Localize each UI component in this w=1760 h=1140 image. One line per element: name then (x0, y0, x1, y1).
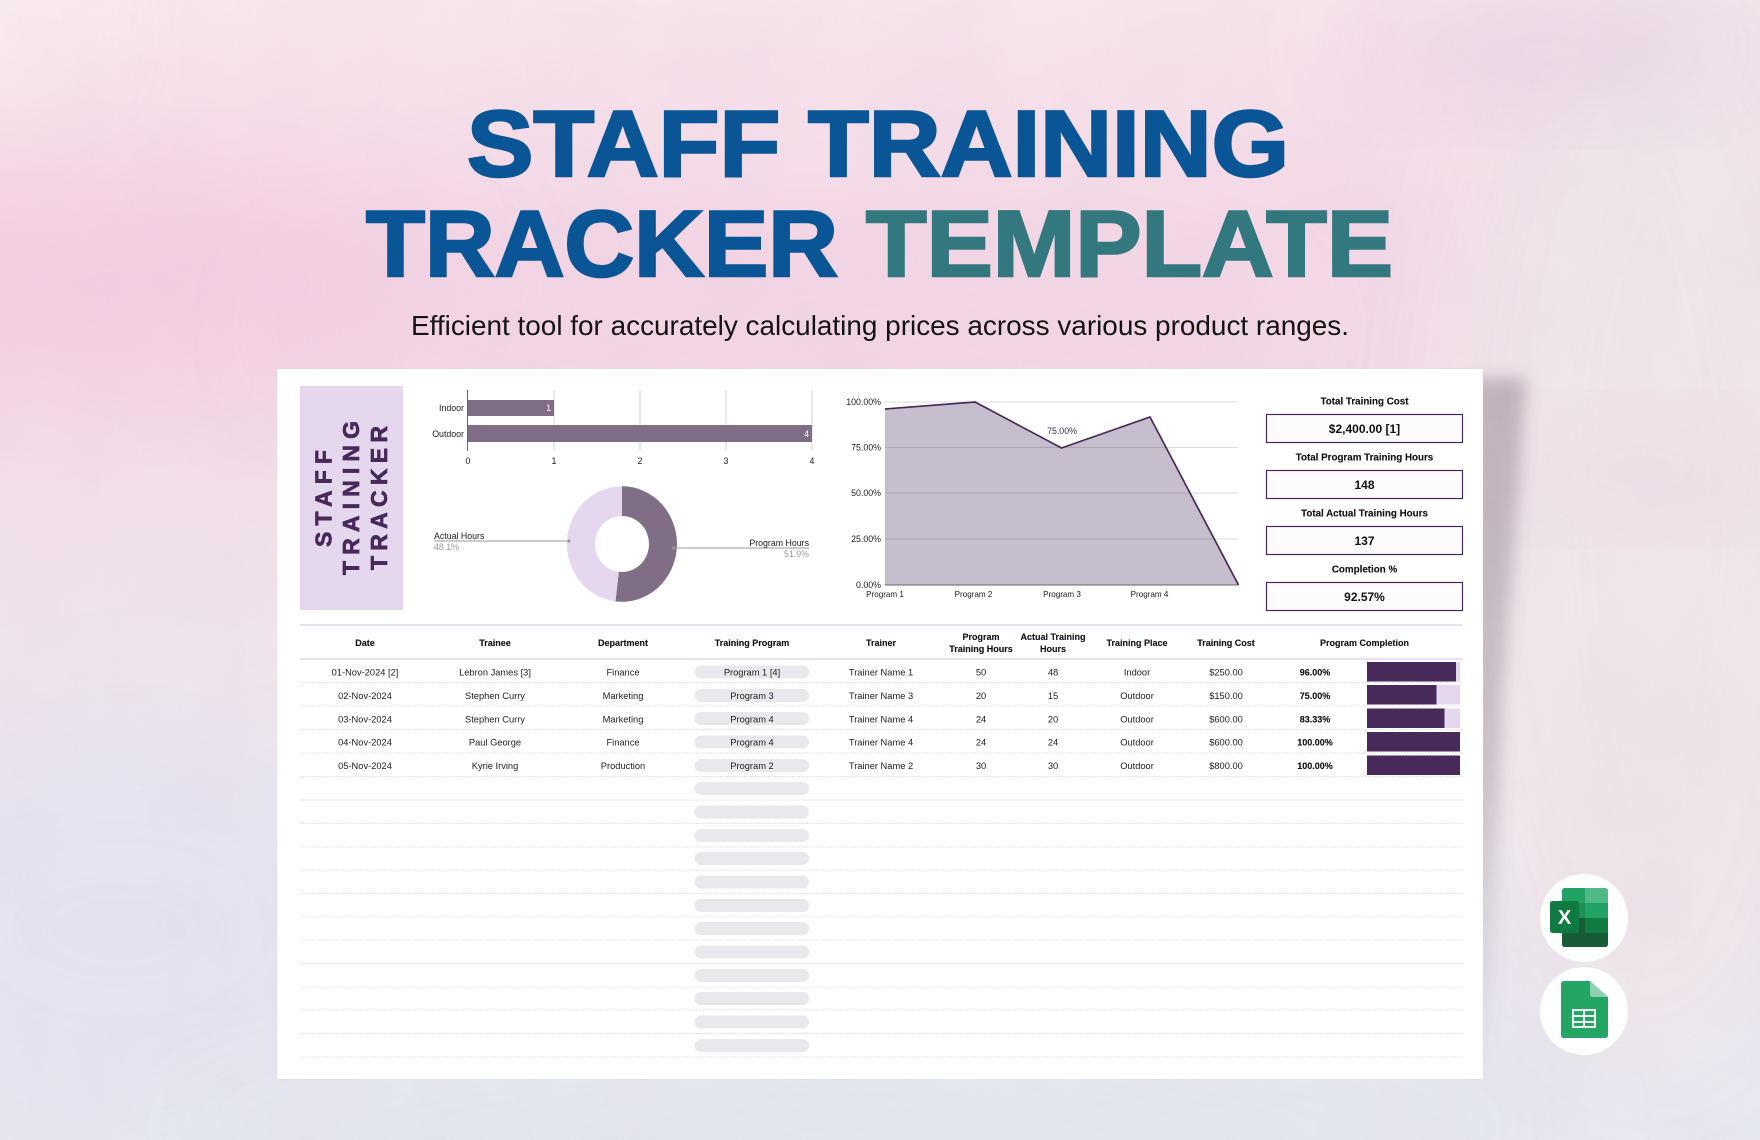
KPI: total program training hours (1266, 452, 1462, 498)
icon: Google Sheets (1540, 967, 1628, 1055)
vertical title block: STAFF (310, 450, 336, 547)
table row 4: Finance (606, 738, 640, 748)
table row 5: Program 2 (730, 761, 774, 771)
area chart: completion by program: 50.00% (851, 488, 881, 498)
title: TEMPLATE (866, 191, 1393, 296)
vertical title block: TRAINING (338, 421, 364, 575)
table row 2: 75.00% (1300, 691, 1330, 701)
table header: Hours (1040, 644, 1066, 654)
bar chart: training place: 1 (552, 456, 557, 466)
table row 1: Lebron James [3] (459, 668, 531, 678)
table row 4: 04-Nov-2024 (338, 738, 392, 748)
table row 4: Program 4 (730, 738, 774, 748)
table header: Trainer (866, 638, 897, 648)
table row 5: Production (601, 761, 645, 771)
KPI: total training cost: Total Training Cost (1320, 396, 1409, 408)
table row 2: 02-Nov-2024 (338, 691, 392, 701)
donut chart: hours (434, 486, 810, 602)
KPI: total training cost: $2,400.00 [1] (1329, 422, 1400, 436)
table row 2: $150.00 (1209, 691, 1243, 701)
donut chart: hours: Program Hours (749, 538, 810, 548)
area chart: completion by program: Program 3 (1043, 590, 1081, 599)
KPI: total program training hours: 148 (1354, 478, 1375, 492)
icon: Microsoft Excel: X (1558, 907, 1572, 929)
table row 1: 01-Nov-2024 [2] (332, 668, 398, 678)
table row 3: Trainer Name 4 (849, 714, 913, 724)
table row 1 (332, 662, 1460, 682)
table row 5: 100.00% (1297, 761, 1333, 771)
table row 4: 24 (1048, 738, 1058, 748)
title: TRACKER (366, 191, 838, 296)
KPI: completion percent: 92.57% (1344, 590, 1385, 604)
table row 1: Indoor (1124, 668, 1150, 678)
bar chart: training place: Outdoor (432, 429, 464, 439)
bar chart: training place: 0 (466, 456, 471, 466)
table header: Program Completion (1320, 638, 1409, 648)
KPI: completion percent (1266, 564, 1462, 610)
table row 2 (338, 685, 1460, 704)
table row 5: Outdoor (1120, 761, 1154, 771)
table row 3: $600.00 (1209, 714, 1243, 724)
table row 3: 20 (1048, 714, 1058, 724)
table row 4: Outdoor (1120, 738, 1154, 748)
table row 2: Stephen Curry (465, 691, 525, 701)
table row 5: 30 (1048, 761, 1058, 771)
table row 4: Paul George (469, 738, 521, 748)
table header: Training Place (1106, 638, 1168, 648)
table row 1: $250.00 (1209, 668, 1243, 678)
table row 5: 30 (976, 761, 986, 771)
table row 5: $800.00 (1209, 761, 1243, 771)
bar chart: training place: 4 (804, 429, 809, 439)
bar chart: training place: 2 (638, 456, 643, 466)
KPI: total program training hours: Total Program Training Hours (1296, 452, 1434, 464)
area chart: completion by program: 75.00% (851, 442, 881, 452)
table header: Training Program (715, 638, 789, 648)
subtitle: Efficient tool for accurately calculating prices across various product ranges. (411, 310, 1349, 341)
table row 5 (338, 756, 1460, 775)
card shadow (1470, 378, 1526, 1050)
KPI: total training cost (1266, 396, 1462, 442)
donut chart: hours: 51.9% (784, 549, 809, 559)
area chart: completion by program: 0.00% (856, 580, 881, 590)
bar chart: training place: Indoor (439, 403, 464, 413)
area chart: completion by program (846, 397, 1238, 599)
program pills (694, 666, 809, 1052)
table row 4 (338, 732, 1460, 752)
bar chart: training place (432, 390, 815, 466)
table row 3: Marketing (603, 714, 643, 724)
area chart: completion by program: 75.00% (1047, 426, 1077, 436)
table header: Training Hours (949, 644, 1013, 654)
table row 3: 03-Nov-2024 (338, 714, 392, 724)
vertical title block: TRACKER (366, 426, 392, 570)
table row 3: Stephen Curry (465, 714, 525, 724)
area chart: completion by program: 25.00% (851, 534, 881, 544)
row dividers (300, 682, 1463, 1057)
donut chart: hours: Actual Hours (434, 531, 485, 541)
table row 5: 05-Nov-2024 (338, 761, 392, 771)
title (366, 91, 1393, 296)
vertical title block (300, 386, 403, 610)
table row 2: Program 3 (730, 691, 774, 701)
table row 2: Marketing (603, 691, 643, 701)
table row 2: Outdoor (1120, 691, 1154, 701)
bar chart: training place: 1 (546, 403, 551, 413)
KPI: total actual training hours (1266, 508, 1462, 554)
area chart: completion by program: Program 2 (955, 590, 993, 599)
table row 3: Outdoor (1120, 714, 1154, 724)
table row 1: 48 (1048, 668, 1058, 678)
area chart: completion by program: Program 1 (866, 590, 904, 599)
table row 5: Trainer Name 2 (849, 761, 913, 771)
table header: Training Cost (1197, 638, 1255, 648)
KPI: total actual training hours: Total Actual Training Hours (1301, 508, 1428, 520)
KPI: completion percent: Completion % (1332, 564, 1397, 576)
table header: Department (598, 638, 648, 648)
spreadsheet card (277, 369, 1483, 1079)
table row 3: Program 4 (730, 714, 774, 724)
table row 4: 100.00% (1297, 738, 1333, 748)
table header (300, 624, 1463, 660)
table row 1: 50 (976, 668, 986, 678)
table row 4: $600.00 (1209, 738, 1243, 748)
bar chart: training place: 3 (724, 456, 729, 466)
table header: Program (962, 632, 1000, 642)
bar chart: training place: 4 (810, 456, 815, 466)
table row 4: 24 (976, 738, 986, 748)
table header: Actual Training (1020, 632, 1086, 642)
table row 2: Trainer Name 3 (849, 691, 913, 701)
table row 1: Finance (606, 668, 640, 678)
area chart: completion by program: Program 4 (1131, 590, 1169, 599)
table header: Date (355, 638, 375, 648)
table header: Trainee (479, 638, 511, 648)
table row 2: 15 (1048, 691, 1058, 701)
donut chart: hours: 48.1% (434, 542, 459, 552)
table row 3: 24 (976, 714, 986, 724)
table row 2: 20 (976, 691, 986, 701)
title: STAFF TRAINING (467, 91, 1289, 196)
KPI: total actual training hours: 137 (1354, 534, 1375, 548)
icon: Microsoft Excel (1540, 874, 1628, 962)
table row 5: Kyrie Irving (472, 761, 518, 771)
table row 4: Trainer Name 4 (849, 738, 913, 748)
table row 1: Program 1 [4] (724, 668, 780, 678)
table row 3 (338, 708, 1460, 728)
table row 1: 96.00% (1300, 668, 1330, 678)
area chart: completion by program: 100.00% (846, 397, 881, 407)
table row 1: Trainer Name 1 (849, 668, 913, 678)
table row 3: 83.33% (1300, 714, 1330, 724)
